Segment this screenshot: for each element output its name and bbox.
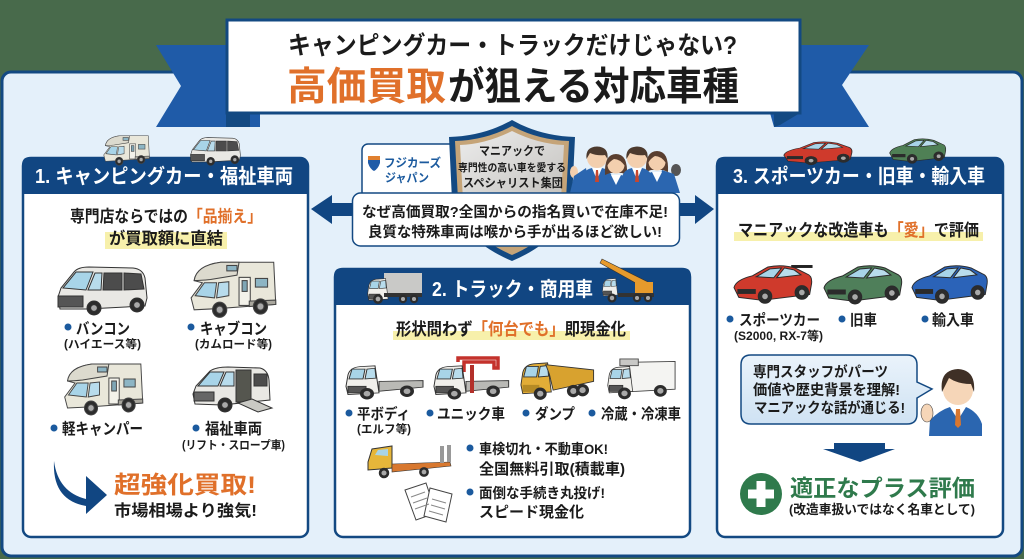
title line 2 bbox=[287, 66, 739, 109]
logo box: フジカーズ bbox=[384, 155, 441, 170]
result: plus evaluation: 適正なプラス評価 bbox=[790, 475, 975, 501]
label: dump truck bbox=[522, 405, 575, 423]
icon: green car on header bbox=[890, 139, 946, 163]
result: plus evaluation bbox=[740, 473, 975, 517]
title line 2: が狙える対応車種 bbox=[448, 66, 739, 109]
panel 2 body bbox=[335, 269, 690, 537]
label: cab conversion: キャブコン bbox=[200, 319, 267, 338]
panel 3 body bbox=[717, 158, 1003, 537]
bullet: fast cash bbox=[466, 485, 605, 521]
panel 1 subheading: 専門店ならではの「品揃え」 bbox=[70, 207, 262, 226]
callout: why high price bbox=[352, 193, 680, 246]
icon: documents bbox=[405, 483, 452, 522]
vehicle: van conversion bbox=[58, 267, 147, 315]
vehicle: refrigerated truck bbox=[608, 359, 675, 399]
vehicle: welfare van bbox=[193, 367, 272, 412]
label: flatbed: 平ボディ bbox=[357, 405, 410, 423]
label: cab conversion: (カムロード等) bbox=[195, 337, 272, 351]
panel 3 header bbox=[716, 157, 1003, 194]
speech bubble: 価値や歴史背景を理解! bbox=[753, 381, 900, 399]
speech bubble bbox=[741, 355, 932, 424]
panel 3 subheading: マニアックな改造車も「愛」で評価 bbox=[738, 220, 979, 240]
icon: box truck bbox=[368, 273, 422, 304]
title banner bbox=[156, 20, 869, 127]
label: imported car: 輸入車 bbox=[932, 311, 974, 329]
label: flatbed bbox=[346, 405, 411, 436]
vehicle: kei camper bbox=[65, 364, 143, 415]
vehicle: cab conversion bbox=[191, 262, 276, 317]
vehicle: dump truck bbox=[521, 363, 594, 400]
panel 1 subheading: が買取額に直結 bbox=[109, 228, 223, 248]
speech bubble: マニアックな話が通じる! bbox=[754, 399, 905, 417]
result: plus evaluation: (改造車扱いではなく名車として) bbox=[789, 502, 975, 517]
staff group bbox=[570, 146, 681, 201]
title line 1: キャンピングカー・トラックだけじゃない? bbox=[288, 31, 737, 60]
label: flatbed: (エルフ等) bbox=[357, 422, 411, 436]
shield: 専門性の高い車を愛する bbox=[458, 161, 566, 174]
label: van conversion bbox=[64, 321, 141, 351]
panel 1 body bbox=[23, 158, 308, 537]
arrow: left bbox=[311, 195, 352, 224]
label: dump truck: ダンプ bbox=[535, 405, 575, 423]
label: welfare van: 福祉車両 bbox=[205, 420, 262, 438]
panel 2 header bbox=[334, 268, 691, 305]
icon: welfare van on header bbox=[191, 138, 240, 165]
icon: crane truck bbox=[600, 259, 654, 303]
label: sports car: (S2000, RX-7等) bbox=[734, 328, 823, 343]
label: sports car: スポーツカー bbox=[739, 312, 820, 329]
label: van conversion: バンコン bbox=[76, 321, 130, 338]
panel 3: sports, classic and imported cars bbox=[716, 139, 1003, 537]
bullet: free towing: 全国無料引取(積載車) bbox=[479, 460, 625, 478]
bullet: fast cash: スピード現金化 bbox=[479, 503, 584, 521]
ribbon left bbox=[156, 45, 260, 127]
callout: why high price: なぜ高価買取?全国からの指名買いで在庫不足! bbox=[362, 203, 668, 221]
callout: strong buying bbox=[114, 472, 257, 520]
title line 2: 高価買取 bbox=[287, 66, 446, 109]
callout: why high price: 良質な特殊車両は喉から手が出るほど欲しい! bbox=[368, 223, 662, 241]
vehicle: classic car bbox=[824, 266, 902, 304]
panel 1 heading: 1. キャンピングカー・福祉車両 bbox=[35, 164, 293, 188]
callout: strong buying: 超強化買取! bbox=[114, 472, 256, 499]
panel 2 subheading: 形状問わず「何台でも」即現金化 bbox=[396, 319, 626, 339]
label: refrigerated truck: 冷蔵・冷凍車 bbox=[601, 406, 681, 423]
callout: strong buying: 市場相場より強気! bbox=[114, 501, 257, 520]
arrow: right bbox=[680, 195, 714, 224]
shield bbox=[449, 120, 575, 261]
label: kei camper: 軽キャンパー bbox=[62, 420, 143, 438]
speech bubble: 専門スタッフがパーツ bbox=[753, 363, 888, 381]
label: cab conversion bbox=[188, 319, 272, 351]
vehicle: flatbed truck bbox=[346, 366, 423, 399]
vehicle: imported car bbox=[912, 266, 987, 303]
icon: camper on header bbox=[104, 136, 149, 165]
label: sports car bbox=[726, 312, 823, 343]
vehicle: crane-mounted truck bbox=[434, 358, 509, 399]
icon: staff member bbox=[921, 369, 982, 436]
bullet: fast cash: 面倒な手続き丸投げ! bbox=[479, 485, 605, 501]
panel 1 subheading bbox=[70, 207, 262, 249]
arrow: curved bbox=[54, 461, 107, 514]
label: van conversion: (ハイエース等) bbox=[64, 337, 141, 351]
bullet: free towing bbox=[466, 441, 625, 478]
label: welfare van: (リフト・スロープ車) bbox=[182, 438, 285, 452]
panel 2: trucks and commercial vehicles bbox=[334, 259, 691, 537]
shield: スペシャリスト集団 bbox=[463, 175, 563, 190]
icon: red car on header bbox=[784, 142, 852, 165]
panel 1 header bbox=[22, 157, 308, 194]
center: specialist group bbox=[311, 120, 714, 261]
vehicle: sports car bbox=[734, 265, 813, 303]
shield: マニアックで bbox=[479, 144, 545, 158]
logo box: ジャパン bbox=[385, 171, 429, 185]
panel 2 heading: 2. トラック・商用車 bbox=[432, 278, 593, 301]
logo box bbox=[362, 144, 472, 198]
label: crane-mounted truck: ユニック車 bbox=[437, 406, 505, 423]
ribbon right bbox=[770, 45, 869, 127]
arrow: down bbox=[823, 443, 895, 462]
label: classic car bbox=[838, 312, 877, 329]
vehicle: carrier truck bbox=[368, 445, 451, 478]
panel 1: camper and welfare vehicles bbox=[22, 136, 308, 537]
title box bbox=[227, 20, 800, 113]
label: welfare van bbox=[182, 420, 285, 452]
panel 3 heading: 3. スポーツカー・旧車・輸入車 bbox=[733, 165, 985, 188]
label: classic car: 旧車 bbox=[850, 312, 877, 329]
bullet: free towing: 車検切れ・不動車OK! bbox=[479, 441, 608, 457]
